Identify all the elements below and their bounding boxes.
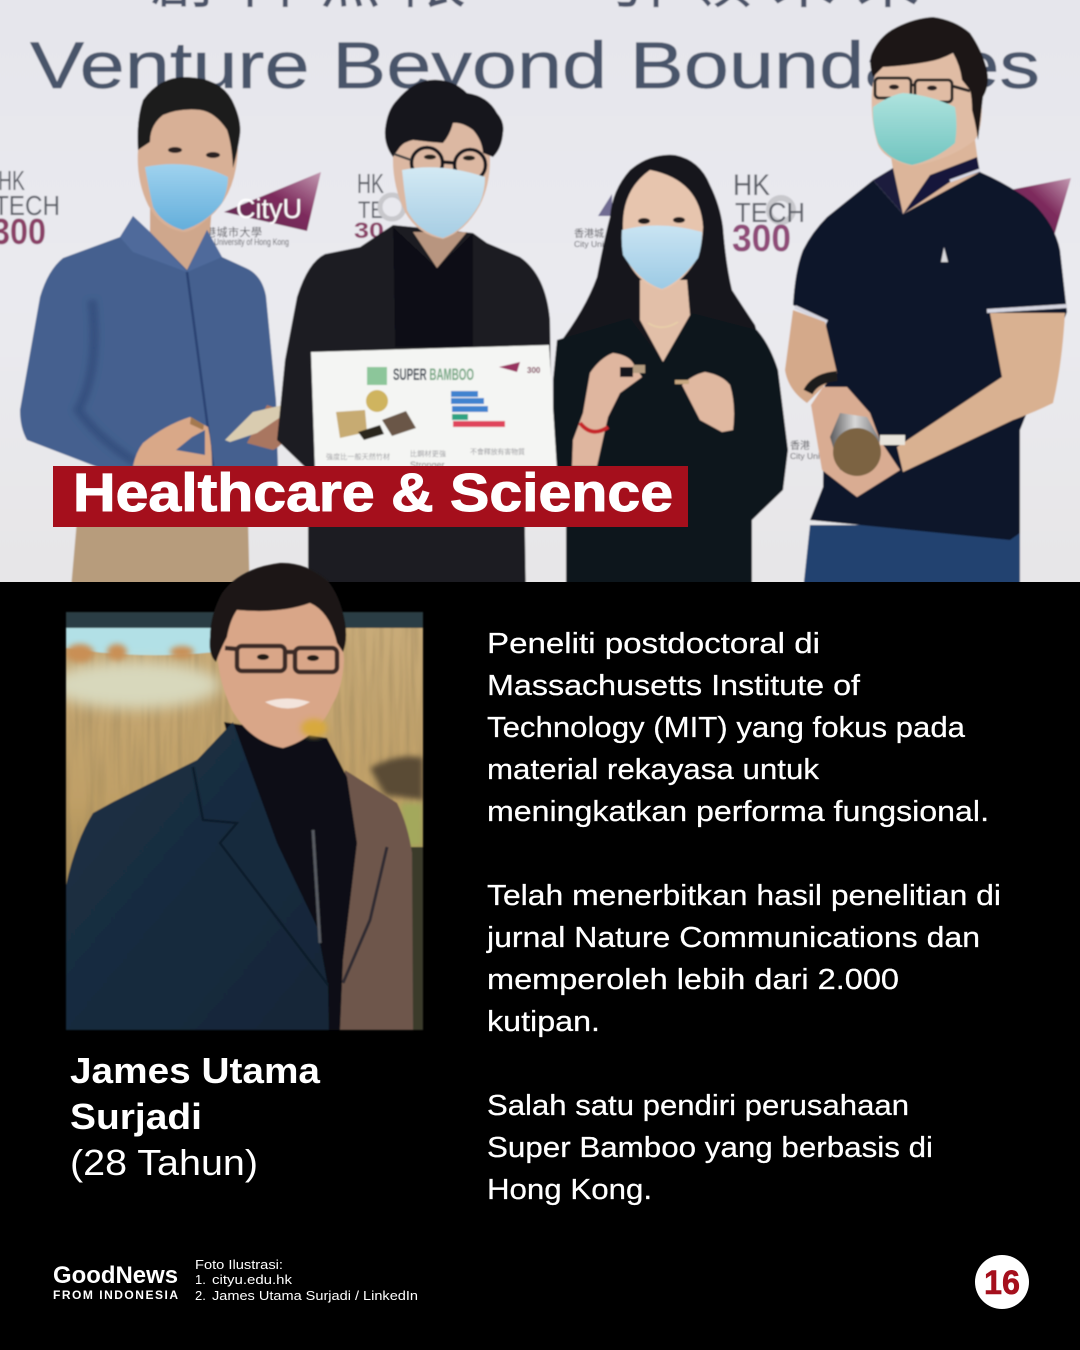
paragraph 2: Telah menerbitkan hasil penelitian di [487, 880, 1001, 912]
paragraph 2: memperoleh lebih dari 2.000 [487, 964, 899, 996]
photo credits: James Utama Surjadi / LinkedIn [212, 1288, 418, 1303]
eyes [638, 217, 685, 224]
smile [265, 698, 310, 708]
logo: CityU left: CityU [236, 193, 302, 224]
text block: biography [486, 628, 1001, 1206]
board captions [326, 447, 525, 470]
round glasses [394, 148, 486, 180]
logo: HK Tech 300 centre: TE [358, 197, 384, 224]
neck [150, 205, 212, 272]
photo backdrop wall [0, 0, 1080, 620]
face mask [402, 167, 485, 238]
pin [941, 247, 948, 262]
logo: CityU caption right: 香港 [790, 440, 810, 452]
hair [385, 80, 503, 157]
paragraph 3: Hong Kong. [487, 1174, 652, 1206]
logo: CityU left [205, 172, 321, 247]
paragraph 1: Technology (MIT) yang fokus pada [487, 712, 966, 744]
blouse [553, 313, 788, 600]
collar [873, 157, 980, 214]
photo scene [0, 0, 1080, 620]
paragraph 1: Massachusetts Institute of [487, 670, 861, 702]
backdrop headline: Venture Beyond Boundaries [30, 28, 1040, 102]
logo: CityU caption right [790, 440, 825, 461]
paragraph 3 [487, 1090, 933, 1206]
board medal [366, 390, 388, 412]
hair [210, 563, 346, 662]
brown coat behind [330, 770, 413, 1030]
paragraph 1: Peneliti postdoctoral di [487, 628, 820, 660]
necklace [648, 322, 678, 327]
left hand with sample [682, 372, 734, 432]
logo: CityU left: University of Hong Kong [214, 237, 289, 247]
board captions: Stronger [410, 460, 445, 470]
product board: Super Bamboo [311, 345, 557, 470]
paragraph 3: Super Bamboo yang berbasis di [487, 1132, 933, 1164]
paragraph 2: jurnal Nature Communications dan [486, 922, 980, 954]
hair [870, 17, 988, 140]
board captions: 比鋼材更強 [410, 449, 446, 458]
panel: hero photo of four researchers [0, 0, 1080, 620]
face [623, 170, 703, 290]
shirt [20, 216, 278, 468]
forearm and hand with sample [572, 353, 642, 466]
product board: Super Bamboo: 300 [527, 366, 541, 375]
photo credits: 1. [195, 1272, 206, 1287]
left arm [785, 310, 837, 403]
logo: HK Tech 300 right: HK [733, 169, 770, 202]
photo credits [195, 1257, 418, 1303]
neck [890, 140, 980, 214]
hand holding wood sample [133, 417, 212, 466]
dark shirt [393, 227, 473, 347]
face mask [873, 93, 956, 165]
logo: CityU partial behind woman: 香港城 [574, 228, 604, 240]
page number badge [975, 1255, 1029, 1309]
photo credits: Foto Ilustrasi: [195, 1257, 283, 1272]
hand cradling cylinder [811, 387, 900, 497]
photo credits: 2. [195, 1288, 206, 1303]
person name [70, 1050, 321, 1183]
portrait photo: James Utama Surjadi [50, 563, 423, 1040]
name line 1: James Utama [70, 1050, 321, 1091]
face mask [145, 164, 228, 230]
glasses [875, 78, 970, 102]
head [217, 595, 344, 748]
sleeve shading [78, 300, 135, 462]
small sample [620, 365, 645, 377]
board captions: 強度比一般天然竹材 [326, 452, 390, 461]
head [393, 120, 490, 239]
paragraph 2: kutipan. [487, 1006, 600, 1038]
board logos [499, 362, 520, 372]
head [137, 108, 238, 231]
navy coat [66, 722, 329, 1040]
photo credits: cityu.edu.hk [212, 1272, 293, 1287]
watch [808, 376, 837, 392]
logo: HK Tech 300 centre: 30 [354, 218, 384, 243]
name line 2: Surjadi [70, 1096, 202, 1137]
red bracelet [580, 423, 608, 432]
glasses [225, 646, 337, 672]
logo: HK Tech 300 centre: HK [357, 168, 384, 199]
hair [138, 77, 240, 168]
age: (28 Tahun) [70, 1142, 258, 1183]
suit [277, 225, 552, 600]
sleeve stripes [795, 307, 827, 322]
board title: SUPER BAMBOO [393, 365, 474, 384]
metal cylinder [830, 413, 905, 476]
lapel [193, 767, 328, 985]
paragraph 3: Salah satu pendiri perusahaan [487, 1090, 909, 1122]
neck and chest [640, 280, 690, 362]
logo: HK Tech 300 right [732, 174, 804, 252]
paragraph 1: material rekayasa untuk [487, 754, 820, 786]
samples [336, 410, 367, 438]
panel: black lower section [0, 582, 1080, 1350]
page number badge: 16 [984, 1264, 1020, 1302]
board logo [367, 367, 387, 385]
logo: CityU partial right [1010, 178, 1071, 236]
eyes [889, 84, 937, 90]
portrait background [50, 612, 423, 1040]
logo: HK Tech 300 right: 300 [732, 218, 791, 260]
logo: CityU partial behind woman [574, 194, 612, 249]
board bar chart [451, 391, 505, 427]
face mask [622, 225, 702, 289]
paragraph 2 [486, 880, 1001, 1038]
placket [187, 272, 213, 466]
paragraph 1 [487, 628, 989, 828]
board captions: 不會釋放有害物質 [470, 447, 525, 456]
eyes [424, 154, 475, 160]
logo: HK Tech 300 centre [354, 168, 404, 243]
heading banner: Healthcare & Science: Healthcare & Science [73, 463, 673, 523]
inner jacket [224, 722, 357, 1030]
zipper [313, 830, 320, 943]
paragraph 1: meningkatkan performa fungsional. [487, 796, 989, 828]
head [872, 45, 982, 166]
hair [562, 154, 757, 363]
person 3: woman in black blouse [553, 155, 788, 600]
polo [793, 172, 1067, 540]
jeans [802, 525, 1020, 600]
logo: CityU caption right: City Univ [790, 451, 825, 461]
logo: CityU partial behind woman: City Univ [574, 239, 609, 249]
person 1: man in blue shirt [20, 77, 290, 600]
shirt collar [120, 216, 222, 272]
right arm [897, 313, 1065, 472]
logo: GoodNews from Indonesia: GoodNews [53, 1262, 178, 1289]
eyes [257, 654, 319, 661]
hand and wood block [246, 404, 282, 451]
logo: GoodNews from Indonesia: FROM INDONESIA [53, 1288, 178, 1302]
logo: CityU left: 港城市大學 [205, 225, 262, 239]
trousers [70, 527, 250, 582]
chin glare [301, 719, 327, 737]
logo: GoodNews from Indonesia [53, 1262, 178, 1302]
person 4: man in navy polo [785, 17, 1067, 600]
neck [413, 232, 467, 268]
logo: HK Tech 300 right: TECH [735, 197, 805, 228]
logo: HK Tech 300 left [0, 170, 59, 246]
eyes [168, 147, 220, 158]
person 2: man in black suit [277, 80, 552, 600]
